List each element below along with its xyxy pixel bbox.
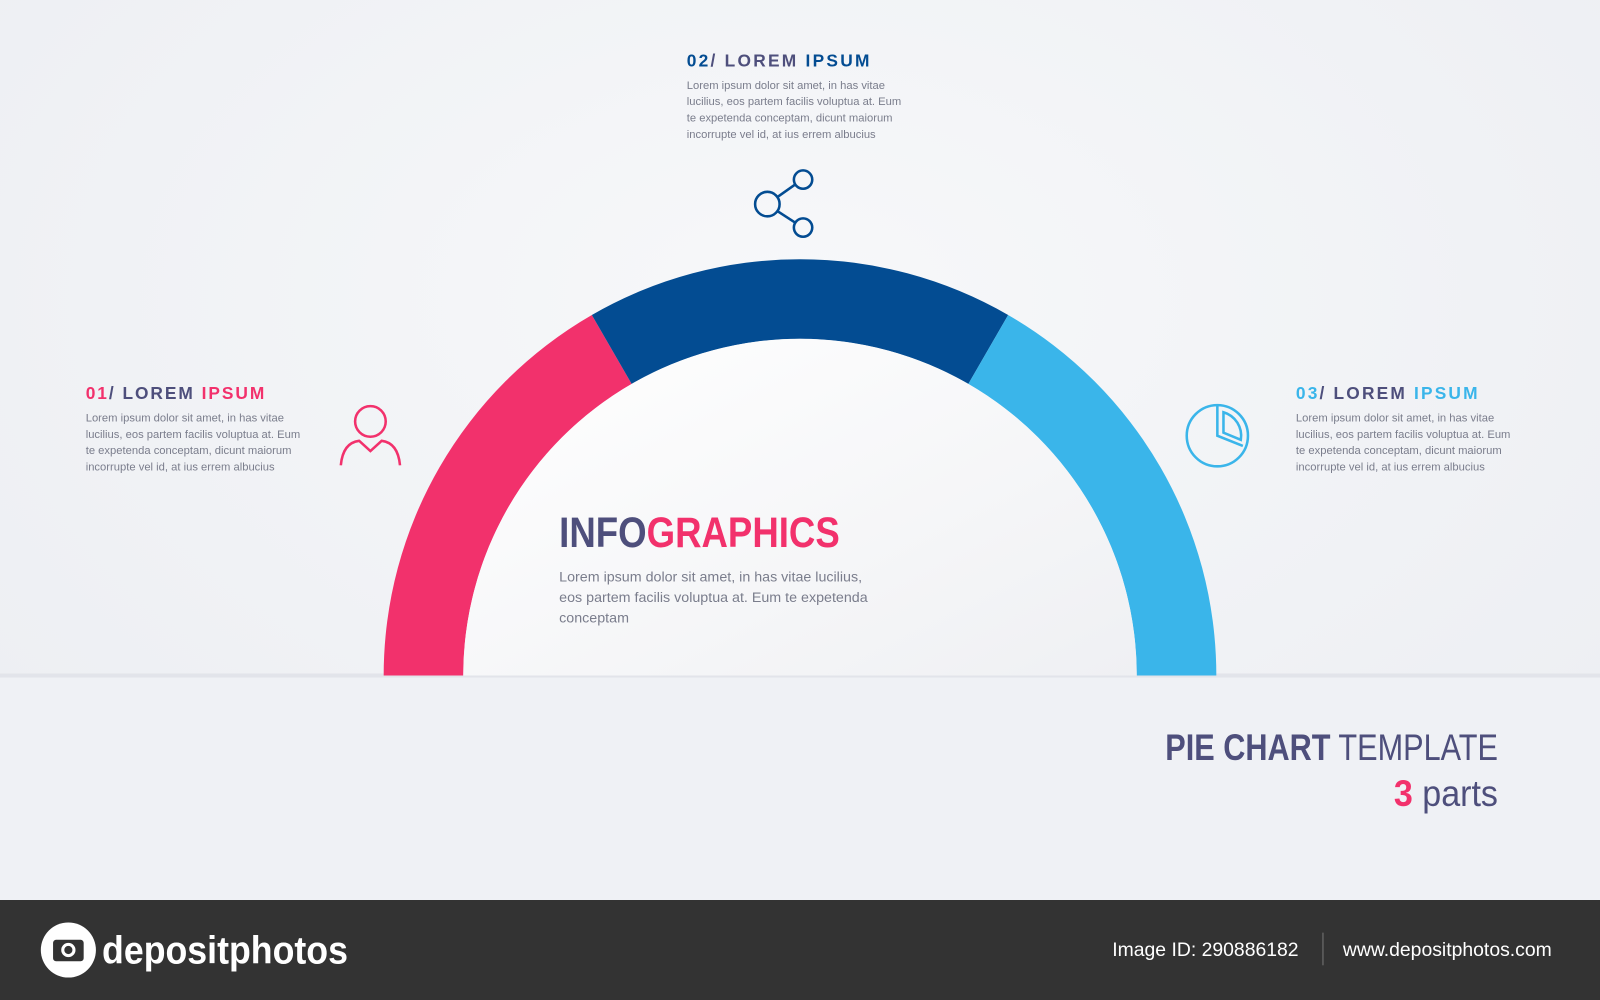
- item 01: 01/ LOREM IPSUM: [86, 383, 264, 403]
- item 01: [86, 383, 300, 473]
- item 03: lucilius, eos partem facilis voluptua at. Eum: [1296, 429, 1510, 441]
- center title: [559, 509, 868, 626]
- item 02: lucilius, eos partem facilis voluptua at. Eum: [687, 96, 901, 108]
- segment 03 light blue: [968, 315, 1216, 676]
- center text block: Lorem ipsum dolor sit amet, in has vitae lucilius,: [559, 570, 862, 586]
- item 03: 03/ LOREM IPSUM: [1296, 383, 1478, 403]
- item 02: incorrupte vel id, at ius errem albucius: [687, 129, 876, 141]
- icon: pie chart: [1187, 405, 1248, 466]
- logo icon: [41, 922, 96, 978]
- template title: PIE CHART TEMPLATE: [1165, 727, 1498, 768]
- center text block: conceptam: [559, 610, 629, 626]
- item 03: te expetenda conceptam, dicunt maiorum: [1296, 445, 1502, 457]
- icon: person: [341, 406, 400, 465]
- segment 02 dark blue: [592, 259, 1008, 384]
- logo text: depositphotos: [102, 929, 348, 972]
- item 03: incorrupte vel id, at ius errem albucius: [1296, 461, 1485, 473]
- item 03: Lorem ipsum dolor sit amet, in has vitae: [1296, 412, 1494, 424]
- template title: [1165, 727, 1498, 814]
- inner disc: [463, 339, 1137, 676]
- image id: Image ID: 290886182: [1112, 939, 1299, 961]
- url: www.depositphotos.com: [1342, 939, 1552, 961]
- footer bar: [0, 900, 1600, 1000]
- item 02: te expetenda conceptam, dicunt maiorum: [687, 112, 893, 124]
- item 02: 02/ LOREM IPSUM: [687, 50, 869, 70]
- segment 01 pink: [384, 315, 632, 676]
- half donut chart: [384, 259, 1216, 676]
- item 01: lucilius, eos partem facilis voluptua at. Eum: [86, 429, 300, 441]
- item 01: incorrupte vel id, at ius errem albucius: [86, 461, 275, 473]
- item 01: te expetenda conceptam, dicunt maiorum: [86, 445, 292, 457]
- template title: 3 parts: [1394, 773, 1498, 814]
- icon: share: [755, 170, 812, 237]
- item 02: [687, 50, 901, 141]
- lower panel: [0, 673, 1600, 900]
- center title: INFOGRAPHICS: [559, 509, 840, 557]
- item 03: [1296, 383, 1510, 473]
- item 02: Lorem ipsum dolor sit amet, in has vitae: [687, 80, 885, 92]
- item 01: Lorem ipsum dolor sit amet, in has vitae: [86, 412, 284, 424]
- center text block: eos partem facilis voluptua at. Eum te expetenda: [559, 590, 868, 606]
